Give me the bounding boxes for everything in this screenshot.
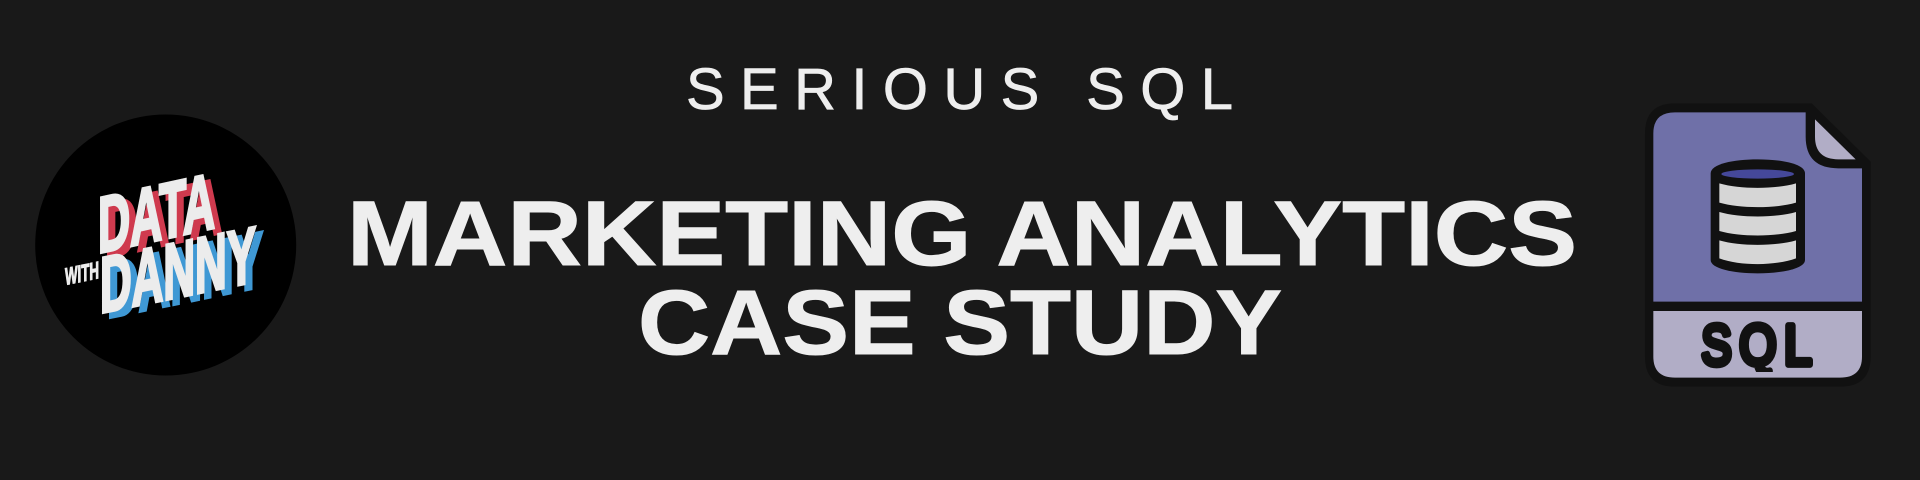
title: Marketing Analytics Case Study: CASE STUDY — [638, 272, 1282, 374]
logo word shadows — [105, 161, 263, 335]
icon: database — [1711, 159, 1805, 273]
logo words: DATA — [98, 156, 215, 270]
subtitle: Serious SQL: SERIOUS SQL — [686, 57, 1233, 122]
logo words: DANNY — [100, 210, 256, 330]
icon: SQL label: L — [1784, 314, 1812, 377]
logo words — [65, 156, 256, 330]
logo word shadows: DANNY — [107, 215, 263, 335]
icon: SQL file — [1645, 103, 1871, 387]
icon: page fold — [1815, 119, 1856, 159]
icon: SQL label — [1700, 321, 1813, 372]
logo: Data With Danny — [35, 114, 296, 376]
logo word shadows: DATA — [105, 161, 222, 275]
logo words: WITH — [65, 257, 99, 291]
title: Marketing Analytics Case Study — [347, 183, 1577, 374]
icon: SQL label: S — [1701, 314, 1732, 376]
title: Marketing Analytics Case Study: MARKETING ANALYTICS — [347, 183, 1577, 285]
icon: SQL label: Q — [1739, 315, 1776, 377]
